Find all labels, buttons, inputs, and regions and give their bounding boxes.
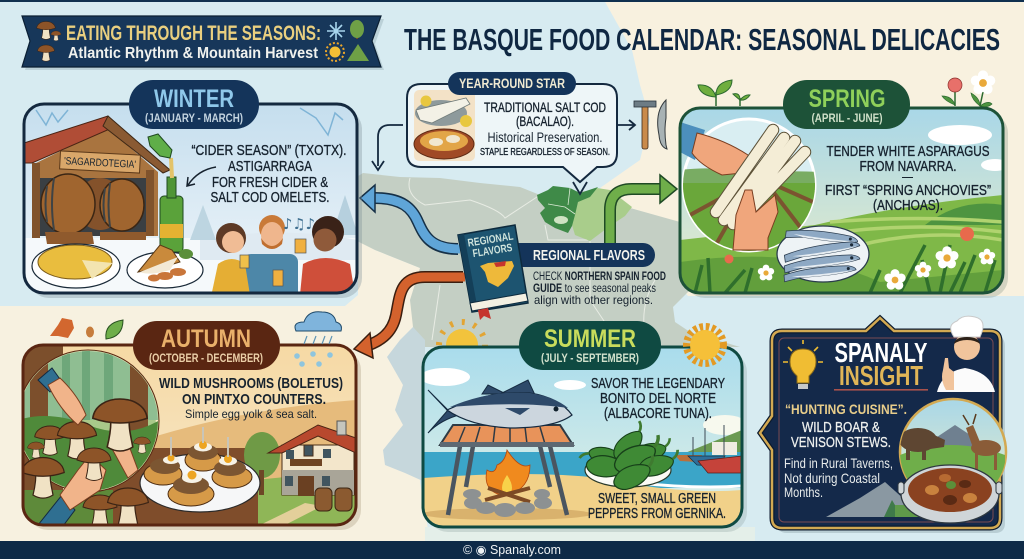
Navarra region	[572, 188, 632, 241]
deer	[963, 414, 1001, 470]
autumn text: ON PINTXO COUNTERS.	[182, 391, 326, 408]
spring text: (ANCHOAS).	[873, 197, 943, 214]
icon: guide book	[458, 225, 528, 320]
panel: winter	[24, 80, 362, 300]
spring text: FROM NAVARRA.	[860, 158, 956, 175]
top edge bar	[0, 0, 1024, 2]
regional flavors text	[533, 271, 666, 307]
arrow: to spring	[610, 175, 677, 245]
arrow: to winter	[360, 185, 460, 249]
insight text: Find in Rural Taverns,	[784, 455, 893, 471]
spring pill	[783, 80, 910, 129]
summer text: PEPPERS FROM GERNIKA.	[588, 505, 726, 522]
icon: snowflake	[327, 22, 345, 40]
farmhouse	[244, 421, 356, 511]
mushroom forest circle	[17, 350, 160, 495]
winter pill: (JANUARY - MARCH)	[145, 113, 243, 125]
spring text	[825, 143, 991, 214]
insight heading	[834, 337, 928, 391]
icons: autumn leaves	[50, 318, 123, 339]
icon: guide book: REGIONAL	[467, 230, 514, 250]
insight text	[784, 401, 907, 500]
map of northern Spain	[355, 173, 740, 482]
summer pill: (JULY - SEPTEMBER)	[541, 353, 639, 365]
year-round text: (BACALAO).	[516, 113, 574, 129]
icon: light bulb	[783, 340, 823, 389]
omelet plate	[32, 244, 120, 288]
icon: sun	[687, 327, 723, 363]
summer text	[588, 375, 726, 522]
salt cod illustration	[414, 90, 475, 161]
people toasting	[212, 215, 353, 292]
autumn pill: (OCTOBER - DECEMBER)	[149, 353, 263, 365]
bottle	[148, 134, 183, 252]
panel: year-round star	[407, 72, 617, 194]
icon: rising sun	[439, 322, 485, 368]
regional flavors text: align with other regions.	[534, 293, 653, 307]
autumn scene	[17, 345, 356, 530]
panel: autumn	[17, 312, 361, 530]
regional flavors pill: REGIONAL FLAVORS	[533, 247, 645, 264]
icon: guide book: FLAVORS	[472, 242, 513, 260]
autumn text	[159, 375, 343, 421]
winter pill	[129, 80, 259, 129]
icon: mountains	[826, 482, 940, 517]
foreground plants	[695, 245, 995, 293]
summer text: SAVOR THE LEGENDARY	[591, 375, 725, 392]
header banner	[22, 16, 384, 70]
regional flavors text: GUIDE to see seasonal peaks	[533, 281, 656, 295]
winter text: ASTIGARRAGA	[228, 158, 312, 175]
year-round text: STAPLE REGARDLESS OF SEASON.	[480, 147, 610, 158]
summer text: SWEET, SMALL GREEN	[598, 490, 716, 507]
boar and deer circle	[898, 398, 1008, 484]
icicles	[36, 108, 343, 135]
year-round text: Historical Preservation.	[488, 130, 602, 145]
cod plate	[127, 245, 203, 288]
icon: chef	[937, 316, 995, 392]
arrow: year-round to winter	[372, 125, 403, 170]
insight text: Months.	[784, 484, 823, 500]
year-round pill	[448, 72, 576, 95]
insight text: VENISON STEWS.	[791, 434, 891, 451]
campfire	[422, 450, 592, 520]
asparagus circle	[680, 119, 820, 255]
footer bar: © ◉ Spanaly.com	[463, 543, 561, 557]
footer bar	[0, 541, 1024, 559]
autumn pill: AUTUMN	[161, 325, 251, 353]
arrow: text to bottle	[187, 167, 216, 186]
regional flavors text: CHECK NORTHERN SPAIN FOOD	[533, 271, 666, 283]
summer text: (ALBACORE TUNA).	[604, 405, 712, 422]
regional flavors pill	[500, 243, 655, 267]
insight text: “HUNTING CUISINE”.	[785, 401, 907, 417]
year-round pill: YEAR-ROUND STAR	[459, 76, 565, 91]
insight heading: INSIGHT	[839, 360, 923, 391]
autumn text: WILD MUSHROOMS (BOLETUS)	[159, 375, 343, 392]
summer pill: SUMMER	[544, 325, 636, 353]
arrow: to autumn	[354, 277, 465, 358]
banner heading: EATING THROUGH THE SEASONS:	[66, 22, 321, 45]
barrels	[41, 174, 146, 244]
summer text: BONITO DEL NORTE	[600, 390, 716, 407]
pintxo plate	[140, 427, 260, 512]
icon: sun	[326, 43, 344, 61]
banner subheading: Atlantic Rhythm & Mountain Harvest	[68, 45, 319, 62]
icon: mushrooms	[37, 22, 61, 61]
autumn pill	[133, 321, 280, 370]
icon: music notes: ♪♫♪	[283, 215, 315, 233]
winter text: FOR FRESH CIDER &	[212, 174, 328, 191]
Basque Country region	[537, 186, 598, 233]
pimientos plate	[579, 421, 678, 489]
spring plants above panel	[698, 70, 995, 107]
year-round text	[480, 99, 610, 158]
winter text: SALT COD OMELETS.	[210, 189, 330, 206]
icon: mountain	[347, 44, 369, 61]
spring pill: SPRING	[808, 85, 886, 113]
insight text: Not during Coastal	[784, 470, 880, 486]
grill	[440, 425, 574, 515]
icon: hammer and knife	[634, 100, 667, 149]
autumn text: Simple egg yolk & sea salt.	[185, 407, 317, 421]
icon: tree	[350, 20, 364, 39]
wild boar	[899, 428, 945, 460]
tuna	[428, 380, 572, 433]
year-round text: TRADITIONAL SALT COD	[484, 99, 606, 115]
arrow: year-round to tools	[617, 120, 635, 130]
panel: spring	[680, 70, 1009, 300]
icon: rain cloud	[294, 312, 341, 367]
fishing boats	[675, 425, 742, 473]
insight text: WILD BOAR &	[802, 419, 880, 436]
hands holding mushrooms	[38, 399, 147, 530]
spring pill: (APRIL - JUNE)	[812, 113, 883, 125]
stew bowl	[898, 465, 1002, 523]
insight heading: SPANALY	[834, 337, 928, 368]
summer scene	[420, 368, 747, 530]
winter pill: WINTER	[154, 85, 234, 113]
winter scene	[24, 108, 358, 300]
panel: regional flavors	[458, 225, 666, 320]
summer pill	[519, 321, 661, 370]
winter text: “CIDER SEASON” (TXOTX).	[192, 142, 346, 159]
sagardotegia sign	[60, 151, 140, 173]
panel: summer	[420, 321, 747, 532]
winter text	[192, 142, 346, 206]
spring scene	[680, 119, 1009, 300]
anchovy plate	[777, 226, 869, 282]
sagardotegia sign: 'SAGARDOTEGIA'	[64, 155, 136, 171]
panel: Spanaly insight	[760, 316, 1006, 533]
arrows from centre to seasons	[354, 120, 677, 358]
